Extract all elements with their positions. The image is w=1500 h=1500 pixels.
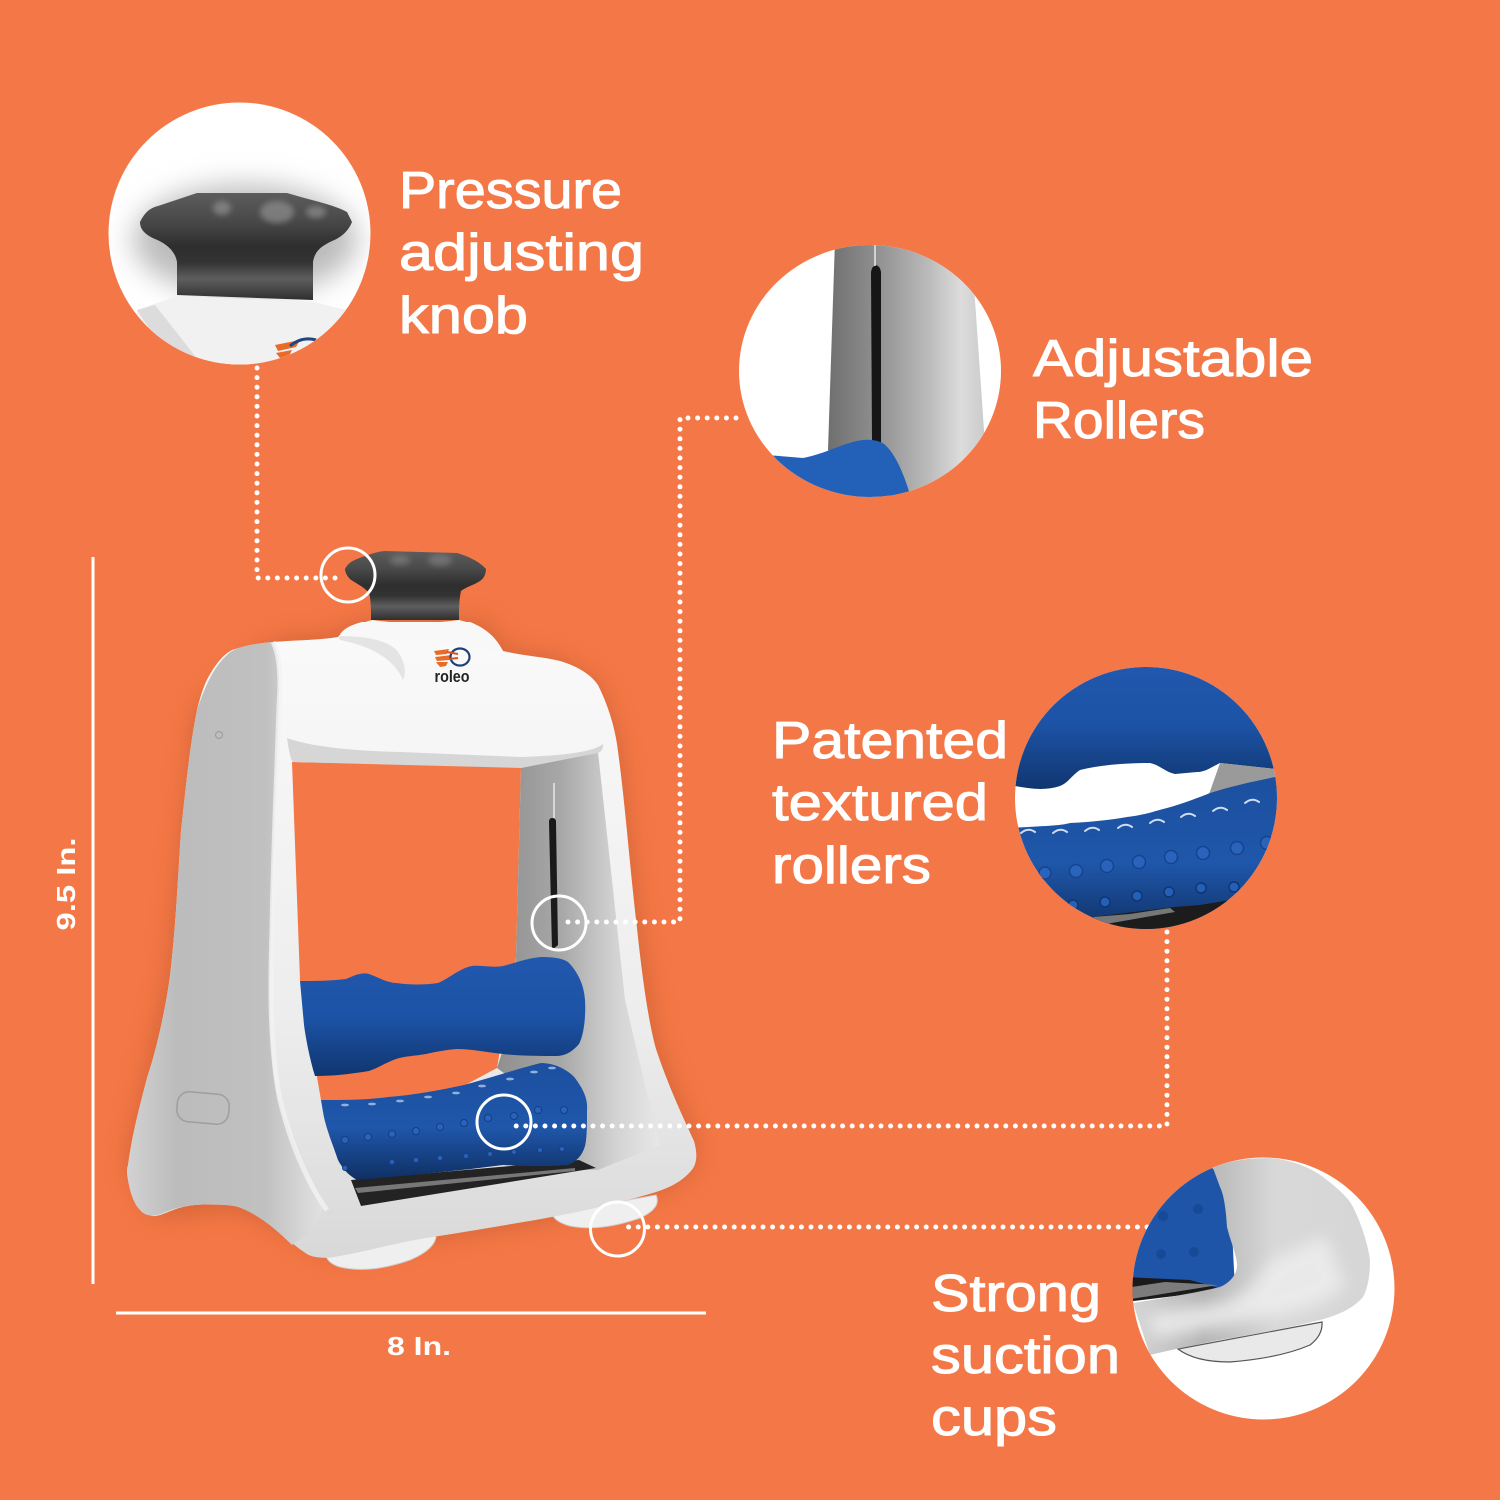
body outline <box>127 622 696 1258</box>
label: adjustable rollers: Rollers <box>1033 392 1205 450</box>
label: pressure adjusting knob: adjusting <box>399 224 644 282</box>
detail circle: knob <box>108 102 370 364</box>
side button oval <box>176 1091 230 1125</box>
dimension: height label: 9.5 In. <box>51 837 81 931</box>
suction cup: left <box>325 1233 436 1269</box>
grey base strip <box>1132 1282 1218 1299</box>
bumps row 3 <box>1068 882 1239 910</box>
side pin <box>216 732 222 738</box>
upper contoured roller <box>300 957 585 1076</box>
window <box>292 762 521 1120</box>
marker ring <box>532 896 586 950</box>
white body <box>137 298 346 364</box>
label: adjustable rollers: Adjustable <box>1033 330 1313 388</box>
knob lobe highlights <box>390 554 452 566</box>
label: strong suction cups: Strong <box>931 1265 1101 1323</box>
dark base <box>1092 900 1228 929</box>
detail circle: adjustable rollers <box>739 245 1001 497</box>
label: pressure adjusting knob: Pressure <box>399 162 622 220</box>
device: massage roller <box>127 551 696 1269</box>
slot line <box>874 245 876 266</box>
left side face <box>128 642 323 1245</box>
label: adjustable rollers <box>1033 330 1313 450</box>
logo word: roleo <box>434 667 470 686</box>
label: pressure adjusting knob <box>399 162 644 345</box>
knob dome collar <box>340 620 503 651</box>
roller bumps <box>1156 1204 1203 1259</box>
blue roller <box>1132 1168 1234 1288</box>
label: patented textured rollers: rollers <box>772 837 931 895</box>
knob halo <box>133 185 357 295</box>
knob highlights <box>213 201 326 223</box>
dimension: width label: 8 In. <box>387 1331 451 1361</box>
bumps row 1 <box>1020 798 1260 834</box>
callout 1: pressure knob connector <box>257 368 375 602</box>
label: patented textured rollers <box>772 712 1008 895</box>
frame corner <box>1133 1158 1370 1355</box>
enlarged knob <box>140 193 352 300</box>
lower roller <box>1018 777 1277 929</box>
label: strong suction cups: cups <box>931 1389 1057 1447</box>
base highlight <box>355 1168 575 1193</box>
dimension: width line <box>116 1312 706 1314</box>
marker ring <box>477 1095 531 1149</box>
marker ring <box>590 1202 644 1256</box>
adjustment slot <box>549 818 558 950</box>
marker ring <box>321 548 375 602</box>
dimension: height line <box>92 557 94 1284</box>
device shadow <box>128 623 694 1257</box>
roller top highlights <box>341 1067 556 1106</box>
callout 3: textured rollers connector <box>477 932 1167 1149</box>
logo fragment <box>275 340 300 358</box>
label: strong suction cups: suction <box>931 1327 1120 1385</box>
grey base strip <box>1093 908 1175 925</box>
detail circle: textured rollers <box>1010 660 1285 935</box>
right inner wall <box>497 752 660 1170</box>
callout 4: suction cups connector <box>590 1202 1147 1256</box>
knob <box>345 551 486 620</box>
dark base slot <box>351 1160 596 1206</box>
top dome shading <box>338 636 405 680</box>
suction cup: right <box>552 1195 657 1228</box>
side face edge <box>271 642 327 1210</box>
logo ring fragment <box>290 339 316 346</box>
label: patented textured rollers: Patented <box>772 712 1008 770</box>
slot line <box>553 783 555 818</box>
bumps row 2 <box>1039 836 1274 910</box>
body crease <box>137 305 196 357</box>
label: pressure adjusting knob: knob <box>399 287 528 345</box>
upper roller <box>1016 667 1274 789</box>
label: patented textured rollers: textured <box>772 774 988 832</box>
detail circle: suction cups <box>1132 1158 1394 1420</box>
label: strong suction cups <box>931 1265 1120 1447</box>
lower textured roller <box>321 1063 587 1180</box>
roller bumps <box>342 1106 568 1170</box>
front frame highlight <box>1145 1235 1345 1338</box>
logo: roleo <box>434 648 470 686</box>
top bar underside <box>287 738 603 768</box>
bump highlights <box>1021 800 1259 833</box>
suction cup <box>1178 1322 1322 1362</box>
grey inner wall <box>828 240 985 505</box>
blue roller end <box>773 440 909 497</box>
callout 2: adjustable rollers connector <box>532 418 736 950</box>
slot <box>871 265 881 443</box>
grey wedge <box>1209 763 1276 794</box>
dark under roller <box>1132 1277 1218 1302</box>
